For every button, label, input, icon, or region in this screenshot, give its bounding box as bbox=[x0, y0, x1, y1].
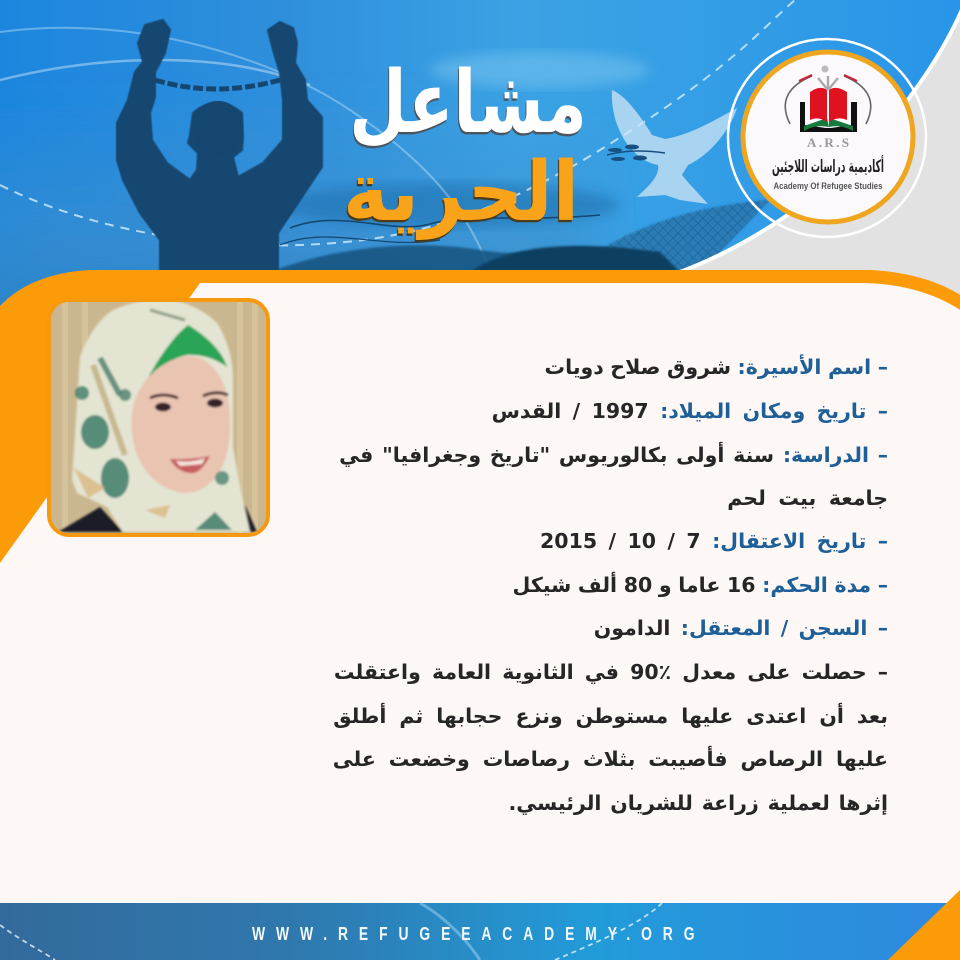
head bbox=[206, 101, 233, 106]
prisoner silhouette bbox=[117, 20, 322, 270]
logo english name: Academy Of Refugee Studies bbox=[774, 181, 882, 192]
gray corner bbox=[0, 0, 960, 320]
story line 4: إثرها لعملية زراعة للشريان الرئيسي. bbox=[509, 791, 888, 815]
study line 2: جامعة بيت لحم bbox=[727, 486, 888, 510]
footer url: WWW.REFUGEEACADEMY.ORG bbox=[252, 924, 695, 945]
white panel bbox=[0, 283, 960, 910]
header sky bbox=[0, 0, 960, 306]
footer orange corner bbox=[888, 890, 960, 960]
sentence line: – مدة الحكم: 16 عاما و 80 ألف شيكل bbox=[513, 573, 888, 597]
story line 1: – حصلت على معدل ٪90 في الثانوية العامة واعتقلت bbox=[334, 660, 888, 684]
logo A.R.S: A.R.S bbox=[807, 135, 849, 150]
logo bbox=[728, 39, 926, 237]
white header edge bbox=[680, 0, 960, 272]
story line 3: عليها الرصاص فأصيبت بثلاث رصاصات وخضعت على bbox=[333, 747, 888, 771]
ridge and fence bbox=[600, 200, 770, 272]
title: orange word: الحرية bbox=[343, 144, 579, 241]
logo emblem: book bbox=[785, 66, 871, 132]
dove bbox=[612, 90, 737, 204]
birth line: – تاريخ ومكان الميلاد: 1997 / القدس bbox=[492, 399, 888, 423]
light swooshes bbox=[0, 28, 490, 270]
orange band and left wedge bbox=[0, 270, 960, 563]
chain bbox=[155, 80, 280, 89]
prison line: – السجن / المعتقل: الدامون bbox=[594, 616, 888, 640]
title: white word: مشاعل bbox=[349, 53, 587, 153]
olive branch bbox=[607, 144, 665, 161]
footer band bbox=[0, 903, 960, 960]
name line: – اسم الأسيرة: شروق صلاح دويات bbox=[545, 355, 888, 379]
biography text block bbox=[333, 354, 888, 815]
footer swooshes bbox=[0, 903, 662, 960]
arrest date line: – تاريخ الاعتقال: 7 / 10 / 2015 bbox=[540, 529, 888, 553]
portrait photo bbox=[49, 300, 268, 535]
study line: – الدراسة: سنة أولى بكالوريوس "تاريخ وجغرافيا" في bbox=[339, 443, 888, 467]
story line 2: بعد أن اعتدى عليها مستوطن ونزع حجابها ثم أطلق bbox=[333, 704, 888, 728]
footer soft arc bbox=[420, 903, 480, 960]
